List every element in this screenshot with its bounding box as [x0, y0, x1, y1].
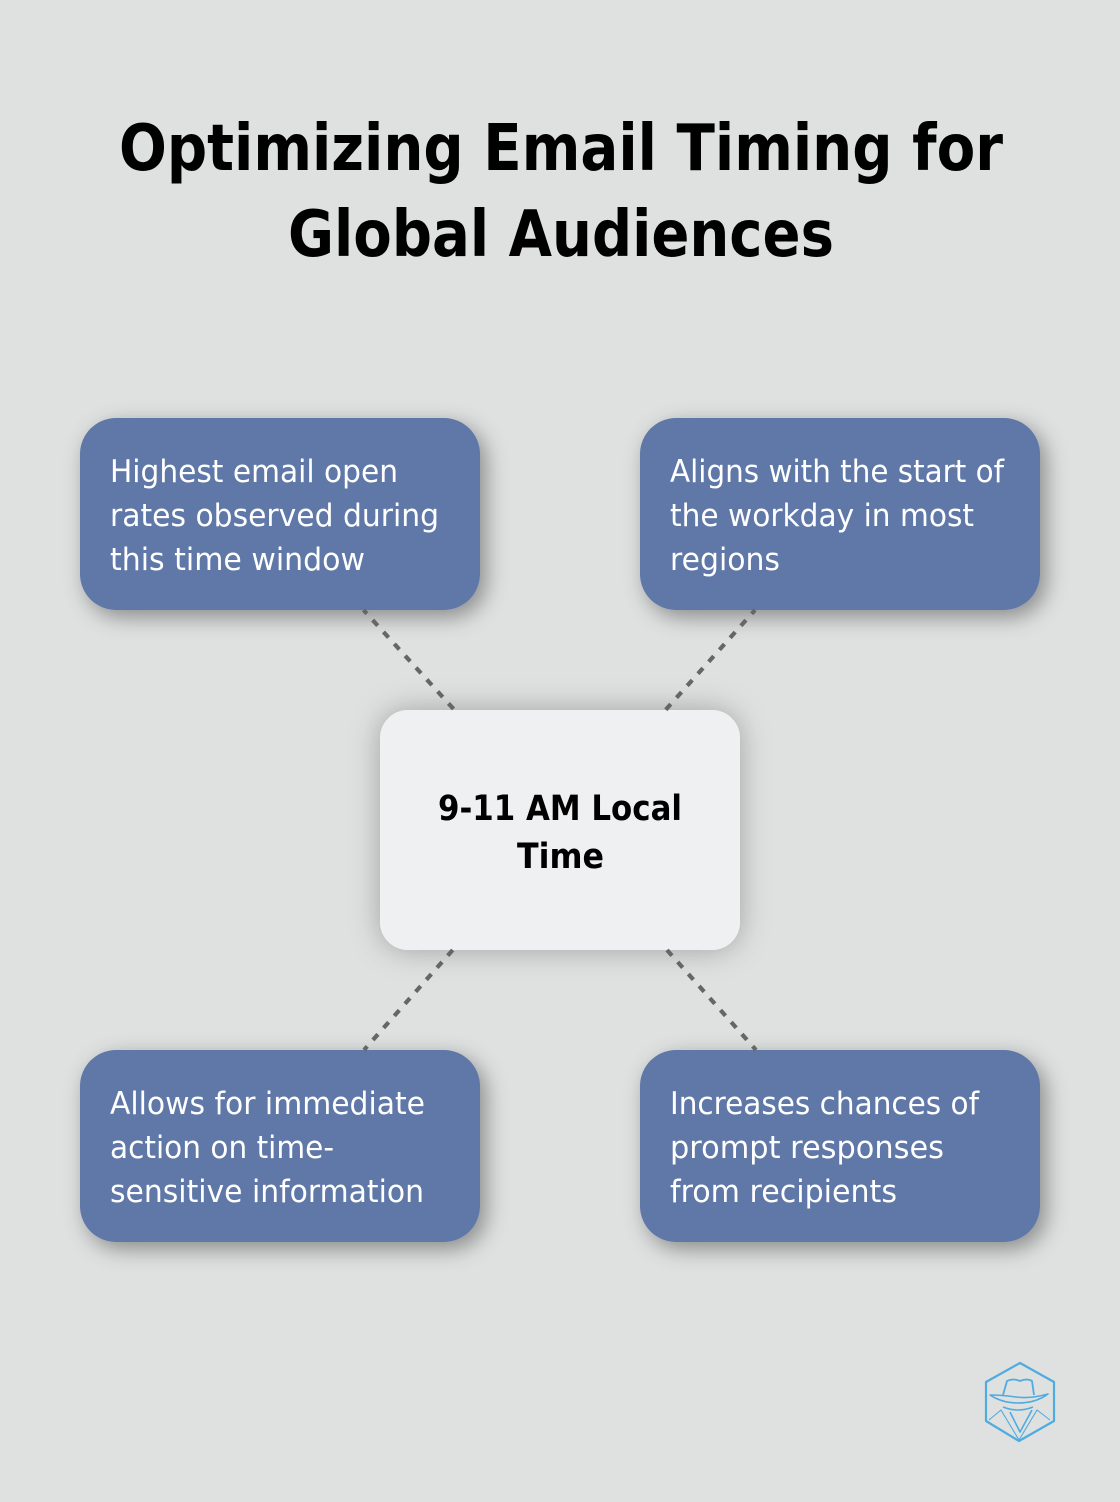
- panel: bottom left benefit: Allows for immediate: [110, 1086, 425, 1122]
- panel: top left benefit: [80, 418, 480, 610]
- title: Optimizing Email Timing for: [119, 112, 1003, 186]
- panel: center time window: Time: [517, 837, 604, 877]
- panel: top right benefit: regions: [670, 542, 780, 578]
- panel: bottom left benefit: action on time-: [110, 1130, 334, 1166]
- panel: bottom right benefit: Increases chances of: [670, 1086, 980, 1122]
- panel: bottom right benefit: prompt responses: [670, 1130, 944, 1166]
- panel: top left benefit: rates observed during: [110, 498, 439, 534]
- panel: top right benefit: Aligns with the start of: [670, 454, 1005, 490]
- panel: bottom left benefit: [80, 1050, 480, 1242]
- dashed connectors: [364, 610, 756, 1050]
- panel: bottom left benefit: sensitive information: [110, 1174, 424, 1210]
- panel: center time window: [380, 710, 740, 950]
- panel: center time window: 9-11 AM Local: [438, 789, 682, 829]
- panel: top left benefit: this time window: [110, 542, 365, 578]
- panel: bottom right benefit: from recipients: [670, 1174, 897, 1210]
- title: Global Audiences: [288, 198, 834, 272]
- panel: top left benefit: Highest email open: [110, 454, 398, 490]
- panel: top right benefit: [640, 418, 1040, 610]
- icon: hexagon spy logo: [986, 1363, 1054, 1441]
- panel: top right benefit: the workday in most: [670, 498, 974, 534]
- panel: bottom right benefit: [640, 1050, 1040, 1242]
- title: [119, 112, 1003, 272]
